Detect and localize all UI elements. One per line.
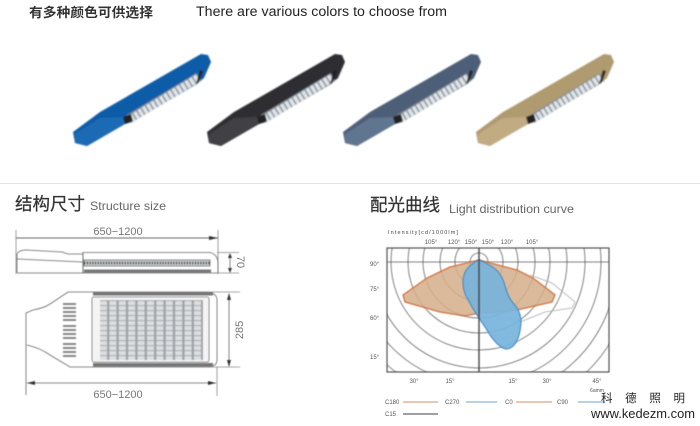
- left angle labels: 60°: [370, 316, 380, 322]
- legend: C180: [385, 400, 400, 406]
- dimension label: bottom length: 650−1200: [93, 389, 143, 401]
- left angle labels: [370, 262, 380, 361]
- top angle labels: [425, 240, 539, 246]
- dimension label: top length: 650−1200: [93, 226, 143, 238]
- drawing: top view: [26, 292, 240, 396]
- dimension label: height 70: 70: [234, 256, 246, 268]
- lamp: blue: [73, 54, 211, 146]
- left angle labels: 90°: [370, 262, 380, 268]
- bottom angle labels: 45°: [592, 379, 602, 385]
- watermark: company name: 科 德 照 明: [601, 391, 685, 405]
- heading: light curve English: Light distribution curve: [449, 202, 574, 216]
- lamp: black: [207, 54, 345, 146]
- curve: C0 orange distribution: [403, 260, 555, 316]
- legend: C15: [385, 412, 397, 418]
- watermark: website: www.kedezm.com: [590, 406, 695, 421]
- heading: light curve Chinese: 配光曲线: [370, 195, 440, 215]
- top angle labels: 150°: [482, 240, 495, 246]
- bottom angle labels: 6amm: [590, 388, 604, 394]
- left angle labels: 75°: [370, 287, 380, 293]
- lamp: slate grey: [343, 54, 481, 146]
- curve: C90 blue distribution: [463, 260, 521, 349]
- bottom angle labels: 30°: [409, 379, 419, 385]
- chart axis title: Intensity[cd/1000lm]: [388, 230, 458, 236]
- dimension label: height 285: 285: [234, 321, 246, 339]
- heading: colour choice English: There are various colors to choose from: [196, 4, 447, 19]
- left angle labels: 15°: [370, 355, 380, 361]
- legend: C270: [445, 400, 460, 406]
- top angle labels: 120°: [448, 240, 461, 246]
- legend: C90: [557, 400, 569, 406]
- heading: colour choice Chinese: 有多种颜色可供选择: [29, 5, 153, 20]
- bottom angle labels: [409, 379, 604, 394]
- bottom angle labels: 30°: [542, 379, 552, 385]
- top angle labels: 150°: [465, 240, 478, 246]
- lamp: champagne: [476, 54, 614, 146]
- chart frame and axis: [387, 248, 609, 372]
- bottom angle labels: 15°: [445, 379, 455, 385]
- drawing: side view: [16, 230, 239, 274]
- polar grid: [387, 248, 609, 372]
- heading: structure size English: Structure size: [90, 199, 166, 213]
- legend: C0: [505, 400, 513, 406]
- chart: light distribution polar curve: [370, 230, 610, 416]
- bottom angle labels: 15°: [508, 379, 518, 385]
- top angle labels: 105°: [425, 240, 438, 246]
- heading: structure size Chinese: 结构尺寸: [15, 194, 85, 214]
- top angle labels: 120°: [501, 240, 514, 246]
- legend: [385, 400, 605, 418]
- top angle labels: 105°: [526, 240, 539, 246]
